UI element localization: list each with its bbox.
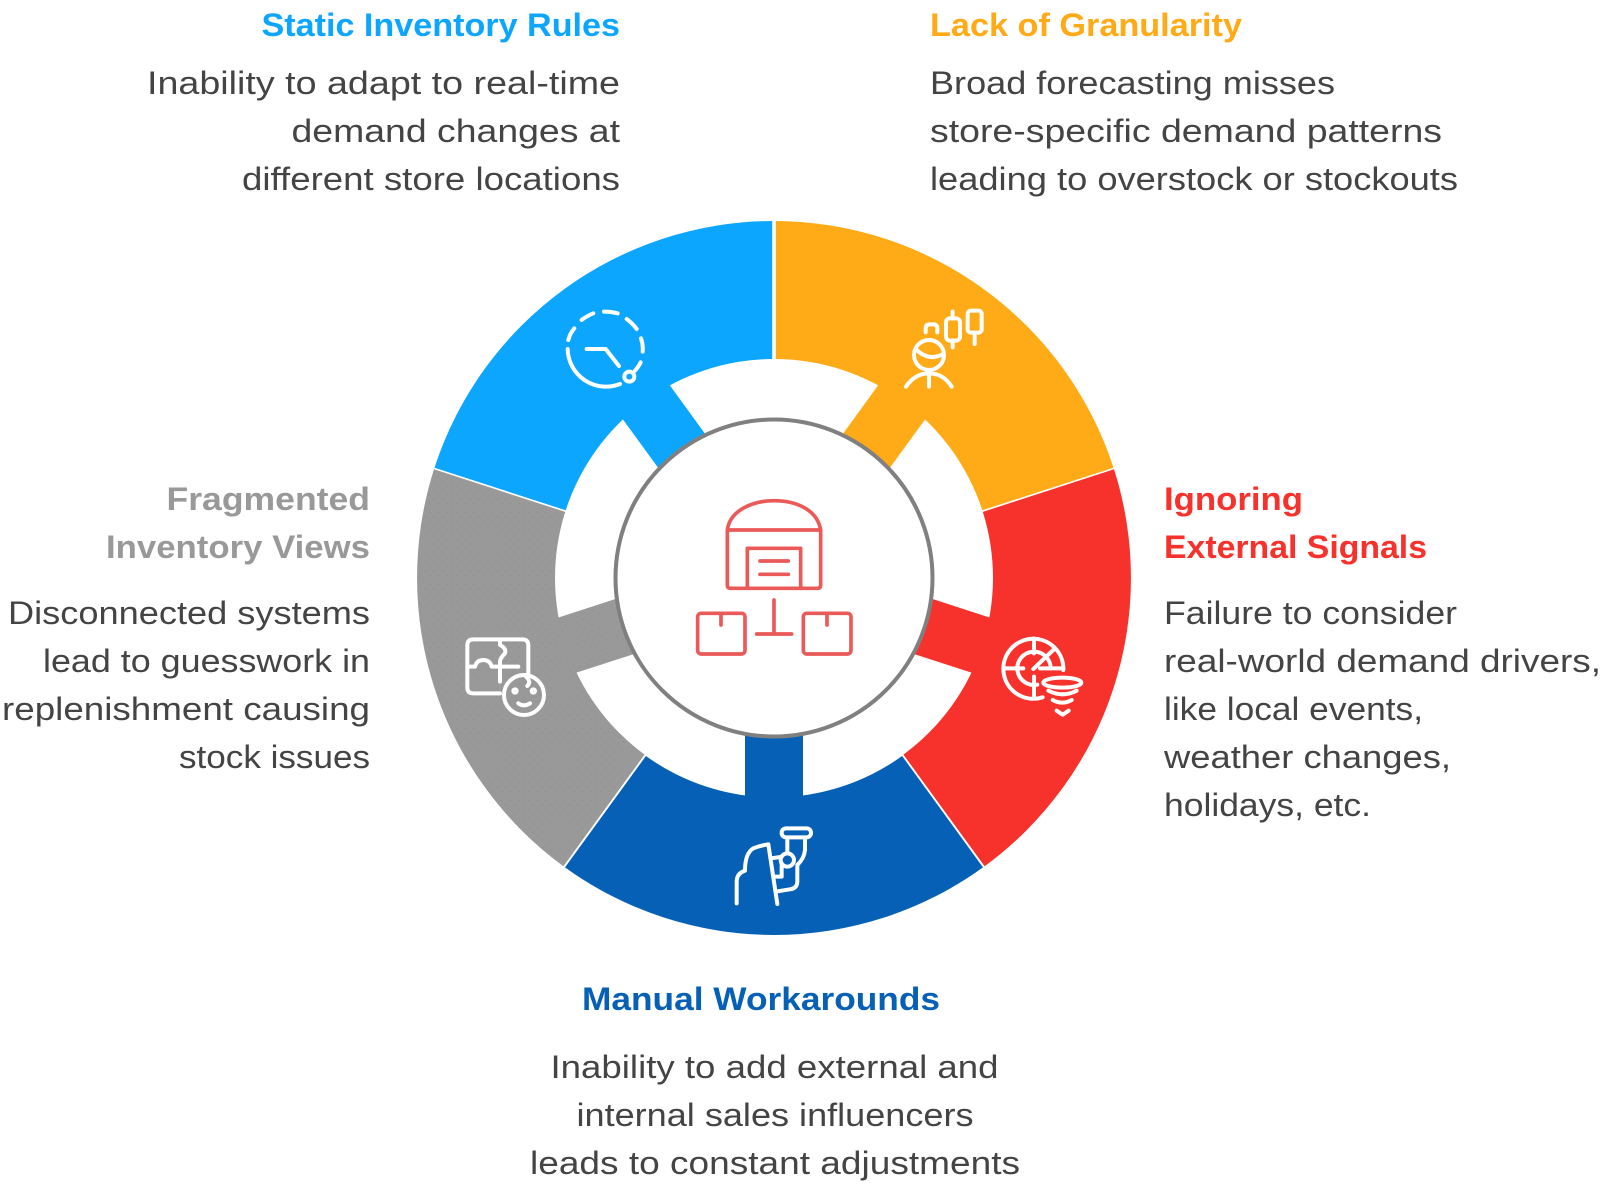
heading: fragmented inventory views: Fragmented <box>166 481 370 517</box>
text block: lack of granularity: Broad forecasting misses <box>930 65 1335 101</box>
text block: lack of granularity: store-specific demand patterns <box>930 113 1442 149</box>
text block: manual workarounds <box>530 981 1020 1181</box>
text block: ignoring external signals: weather changes, <box>1163 739 1451 775</box>
text block: static inventory rules <box>147 7 620 197</box>
heading: static inventory rules: Static Inventory Rules <box>262 7 620 43</box>
icon: warehouse network <box>698 501 851 654</box>
text block: lack of granularity <box>930 7 1458 197</box>
text block: lack of granularity: leading to overstock or stockouts <box>930 161 1458 197</box>
text block: manual workarounds: internal sales influencers <box>576 1097 974 1133</box>
segment: static inventory rules <box>434 221 772 510</box>
text block: manual workarounds: leads to constant adjustments <box>530 1145 1020 1181</box>
text block: ignoring external signals: Failure to consider <box>1164 595 1457 631</box>
text block: fragmented inventory views <box>2 481 370 775</box>
center circle <box>616 420 932 736</box>
text block: manual workarounds: Inability to add external and <box>550 1049 998 1085</box>
icon: hand with lamp <box>737 828 811 904</box>
text block: ignoring external signals: like local events, <box>1164 691 1423 727</box>
icon: puzzle and face <box>467 639 544 715</box>
text block: ignoring external signals: real-world demand drivers, <box>1164 643 1601 679</box>
heading: lack of granularity: Lack of Granularity <box>930 7 1242 43</box>
icon: person with candlesticks <box>906 311 982 387</box>
segment: lack of granularity <box>776 221 1114 510</box>
text block: fragmented inventory views: stock issues <box>179 739 370 775</box>
text block: fragmented inventory views: lead to guesswork in <box>43 643 370 679</box>
text block: fragmented inventory views: replenishment causing <box>2 691 370 727</box>
heading: manual workarounds: Manual Workarounds <box>582 981 940 1017</box>
heading: ignoring external signals: External Signals <box>1164 529 1427 565</box>
text block: ignoring external signals <box>1163 481 1601 823</box>
text block: static inventory rules: different store locations <box>242 161 620 197</box>
text block: static inventory rules: demand changes at <box>292 113 620 149</box>
segment: fragmented inventory views <box>417 469 646 866</box>
donut chart <box>417 221 1131 935</box>
heading: ignoring external signals <box>1164 481 1427 565</box>
text block: static inventory rules: Inability to adapt to real-time <box>147 65 620 101</box>
heading: fragmented inventory views <box>106 481 370 565</box>
heading: fragmented inventory views: Inventory Views <box>106 529 370 565</box>
heading: ignoring external signals: Ignoring <box>1164 481 1303 517</box>
segment: manual workarounds <box>565 722 983 935</box>
segment: ignoring external signals <box>902 469 1131 866</box>
icon: radar and tornado <box>1003 638 1081 715</box>
text block: fragmented inventory views: Disconnected systems <box>8 595 370 631</box>
text block: ignoring external signals: holidays, etc. <box>1164 787 1371 823</box>
icon: dashed clock <box>568 312 643 387</box>
